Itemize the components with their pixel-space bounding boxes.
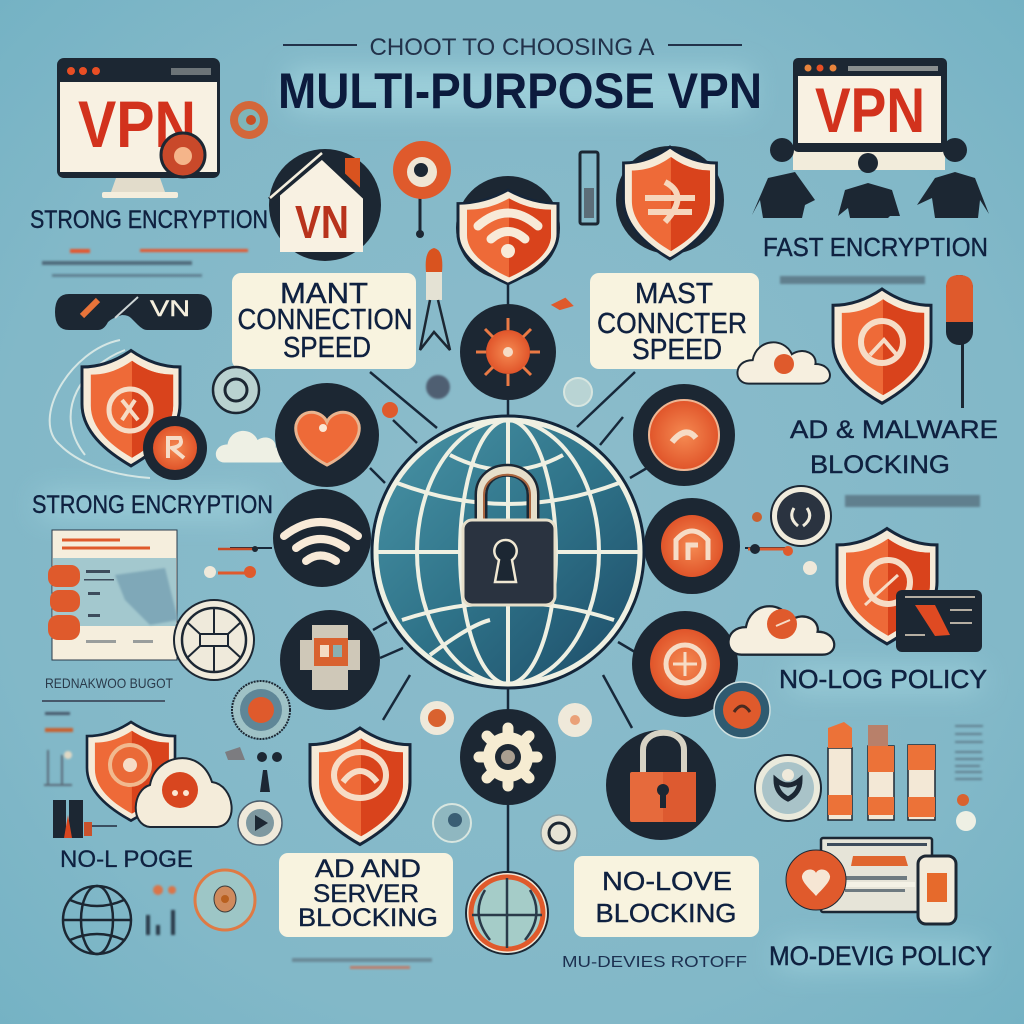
callout: ad and server blocking: AD AND <box>315 855 421 883</box>
people silhouettes <box>752 138 989 218</box>
icon: small tower <box>580 152 598 224</box>
icon: house circle: VN <box>295 196 349 248</box>
label: ad and malware blocking: AD & MALWARE <box>790 416 998 444</box>
icon: orange circle right lower <box>632 611 738 717</box>
icon: cloud heart <box>729 606 834 655</box>
icon: VPN monitor left: VPN <box>78 87 196 161</box>
title eyebrow: CHOOT TO CHOOSING A <box>370 34 654 61</box>
icon: VPN pill <box>55 294 212 330</box>
icon: ring bottom middle right <box>541 815 577 851</box>
decorative rows near right shield <box>780 276 983 780</box>
icon: house circle <box>269 149 381 261</box>
callout: ad and server blocking <box>279 853 453 937</box>
icon: small ring right <box>771 486 831 546</box>
icon: connector dots left <box>204 546 258 578</box>
label: strong encryption top: STRONG ENCRYPTION <box>30 206 268 234</box>
icon: padlock circle <box>606 730 716 840</box>
icon: wire globe bottom left <box>63 886 131 954</box>
callout: connection speed left: SPEED <box>283 332 371 364</box>
label: ad and malware blocking: BLOCKING <box>810 451 950 479</box>
title <box>278 34 762 119</box>
icon: crosshair globe bottom <box>466 872 548 954</box>
icon: cloud right <box>737 342 830 384</box>
icon: VPN presentation screen <box>752 58 989 218</box>
icon: small items left column <box>44 712 73 785</box>
callout: connection speed left: MANT <box>280 278 368 310</box>
icon: chip circle <box>280 610 380 710</box>
icon: VPN pill: VN <box>150 296 190 321</box>
connector lines <box>230 280 790 872</box>
icon: screen and phone <box>786 838 956 924</box>
label: no-log policy: NO-LOG POLICY <box>779 664 987 694</box>
icon: orange shield circle <box>616 146 724 259</box>
callout: no-love blocking: BLOCKING <box>596 898 736 928</box>
small caption left: REDNAKWOO BUGOT <box>45 675 173 691</box>
callout: connection speed right <box>590 273 759 369</box>
icon: orange ring bottom left <box>195 870 255 930</box>
icon: VPN monitor left <box>57 58 220 198</box>
decorative text rows left <box>42 249 248 277</box>
icon: wireframe sphere <box>174 600 254 680</box>
label: ad and malware blocking <box>790 416 998 479</box>
icon: gear circle <box>460 709 556 805</box>
icon: ring bottom middle <box>433 804 471 842</box>
callout: connection speed right: SPEED <box>632 334 722 366</box>
panel: browser list <box>48 530 178 660</box>
icon: capsule pin <box>946 275 973 408</box>
label: mo-devig policy: MO-DEVIG POLICY <box>769 941 992 971</box>
callout: connection speed left: CONNECTION <box>238 304 412 336</box>
icon: small items near globe <box>148 885 176 935</box>
label: multi-device small: MU-DEVIES ROTOFF <box>562 954 747 971</box>
icon: shield center lower left <box>310 728 410 844</box>
callout: connection speed right: MAST <box>635 278 713 310</box>
label: no-l poge: NO-L POGE <box>60 846 193 873</box>
label: strong encryption middle: STRONG ENCRYPTION <box>32 491 273 519</box>
callout: ad and server blocking: BLOCKING <box>298 904 438 932</box>
label: fast encryption: FAST ENCRYPTION <box>763 232 988 262</box>
icon: target small top left <box>230 101 268 139</box>
padlock <box>463 470 555 605</box>
chart: central globe with padlock <box>372 416 644 688</box>
icon: small orange ring <box>420 701 454 735</box>
icon: shield with badge left <box>50 340 207 480</box>
icon: antenna <box>420 248 450 350</box>
icon: small dots right <box>956 794 976 831</box>
icon: connector dots right <box>748 512 817 575</box>
icon: wifi circle <box>273 489 371 587</box>
icon: ring small left <box>232 681 290 739</box>
callout: ad and server blocking: SERVER <box>313 880 419 908</box>
icon: orange circle right middle <box>644 498 740 594</box>
icon: shield and cloud bottom left <box>87 722 232 827</box>
icon: small cloud left <box>216 431 287 462</box>
icon: dark marks lower left <box>225 747 282 792</box>
icon: orange circle right top <box>633 384 735 486</box>
icon: wifi shield <box>456 176 560 284</box>
icon: bars small left <box>53 800 117 838</box>
callout: no-love blocking <box>574 856 759 937</box>
icon: shield right <box>833 289 931 403</box>
icon: wispy dots upper centre <box>382 300 592 418</box>
icon: small ring <box>213 367 259 413</box>
icon: VPN presentation screen: VPN <box>815 76 925 146</box>
callout: connection speed right: CONNCTER <box>597 308 747 340</box>
title main: MULTI-PURPOSE VPN <box>278 63 762 119</box>
callout: connection speed left <box>232 273 416 369</box>
icon: gauge ring <box>755 755 821 821</box>
icon: sun circle <box>460 304 556 400</box>
icon: heart circle <box>275 383 379 487</box>
icon: ring lower left <box>238 801 282 845</box>
icon: small orange circle right <box>714 682 770 738</box>
icon: cream dot <box>558 703 592 737</box>
icon: shield with card <box>837 528 982 652</box>
chart: three orange bars <box>828 722 935 820</box>
decorative text row bottom <box>292 958 432 969</box>
callout: no-love blocking: NO-LOVE <box>602 866 732 896</box>
icon: orange target <box>393 141 451 238</box>
